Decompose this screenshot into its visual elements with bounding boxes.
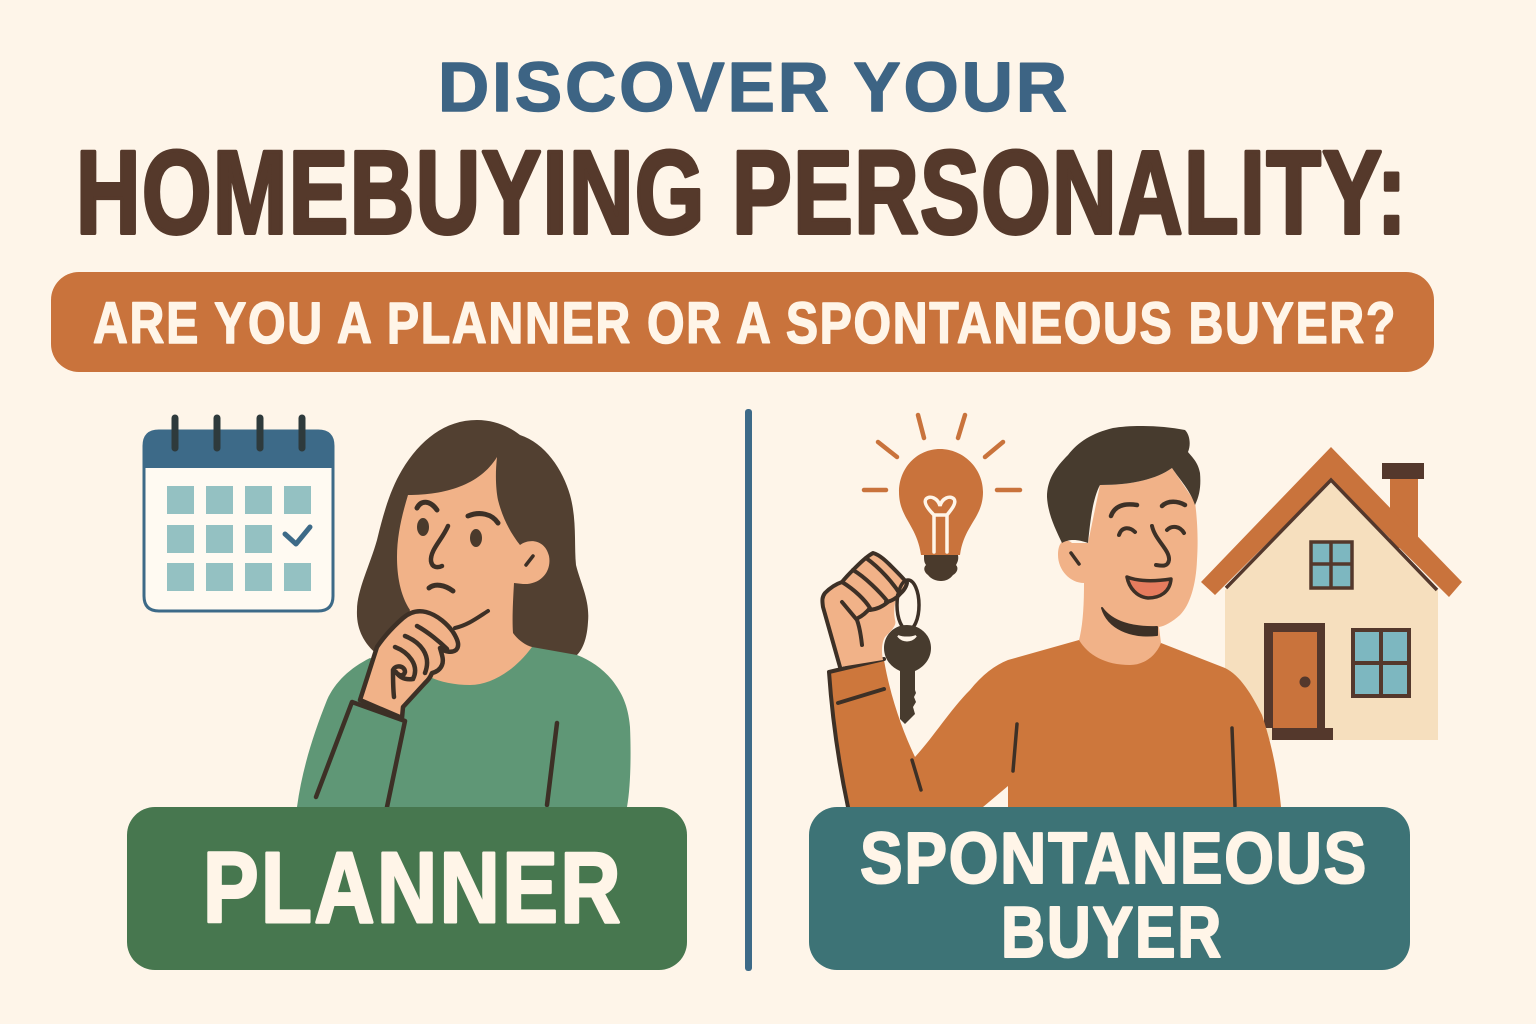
- label: spontaneous buyer: SPONTANEOUS: [860, 819, 1368, 899]
- house roof: [1201, 447, 1462, 597]
- woman nose: [431, 526, 448, 567]
- house upper window: [1311, 542, 1352, 588]
- man nose: [1152, 526, 1169, 566]
- man eyebrows: [1111, 502, 1185, 516]
- man sweater folds: [912, 724, 1235, 806]
- woman fingers: [393, 626, 447, 697]
- illustration: planner woman: [297, 420, 631, 807]
- icon: light bulb: [864, 415, 1020, 581]
- man ear detail: [1071, 553, 1079, 564]
- woman sleeve lines: [316, 702, 557, 807]
- icon: calendar: [143, 418, 334, 611]
- bulb rays: [864, 415, 1020, 490]
- woman sweater: [297, 647, 631, 807]
- man mouth: [1127, 577, 1171, 598]
- man arm outline: [829, 659, 884, 807]
- key ring: [897, 580, 919, 630]
- bulb base: [924, 555, 958, 581]
- woman mouth: [429, 585, 453, 591]
- divider: [745, 409, 752, 971]
- illustration: spontaneous man: [822, 426, 1281, 807]
- label: spontaneous buyer: BUYER: [1001, 893, 1223, 973]
- house door: [1264, 623, 1333, 740]
- subtitle banner: [51, 272, 1434, 372]
- label: planner: PLANNER: [203, 832, 623, 944]
- label: planner: [127, 807, 687, 970]
- man neck and face: [1058, 468, 1198, 665]
- woman hand: [360, 611, 458, 718]
- woman ear detail: [526, 556, 533, 565]
- woman eyes: [417, 518, 482, 547]
- man chin line: [1102, 608, 1157, 636]
- man eyes: [1119, 527, 1184, 535]
- hand holding keys: [822, 553, 931, 724]
- illustration: house: [1201, 447, 1462, 740]
- woman jaw line: [455, 611, 488, 628]
- bulb filament: [925, 497, 955, 552]
- woman face and neck: [397, 457, 549, 685]
- woman hair: [357, 420, 588, 655]
- man sweater: [829, 640, 1281, 807]
- man hair: [1047, 426, 1200, 543]
- woman eyebrows: [417, 502, 498, 523]
- house lower window: [1353, 630, 1409, 696]
- title line 1: DISCOVER YOUR: [438, 48, 1070, 126]
- man finger lines: [842, 558, 900, 645]
- key: [884, 625, 931, 724]
- house walls: [1225, 483, 1438, 740]
- label: spontaneous buyer: [809, 807, 1410, 973]
- house chimney: [1390, 478, 1418, 548]
